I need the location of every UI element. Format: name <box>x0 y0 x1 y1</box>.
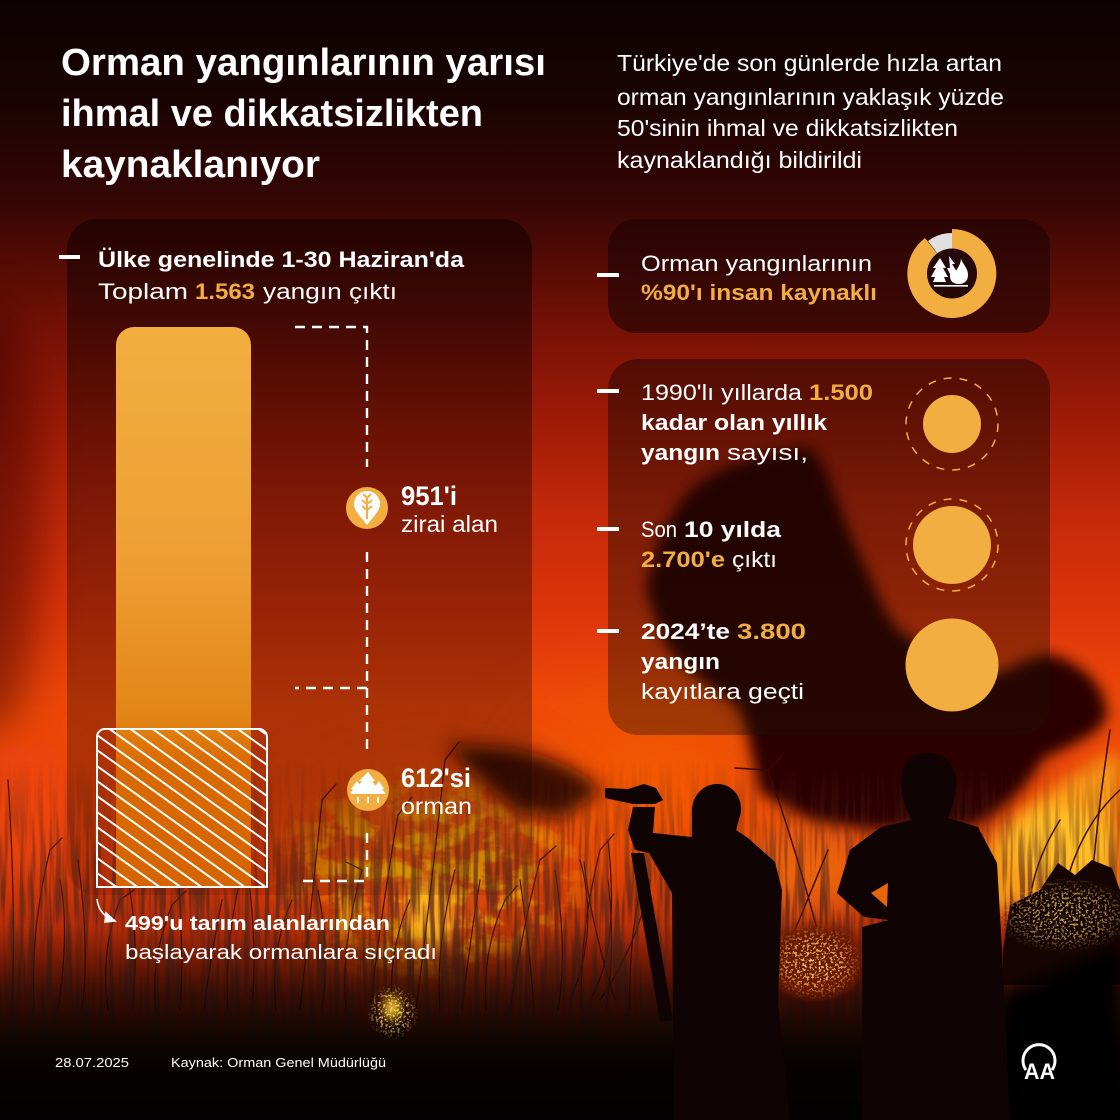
item: 2024: 3.800 <box>737 619 806 644</box>
text: 90 percent: %90'ı insan kaynaklı <box>641 280 877 305</box>
title: Orman yangınlarının yarısı <box>61 42 546 84</box>
icon: forest <box>347 769 389 811</box>
item: last 10 years: 10 yılda <box>684 517 782 542</box>
label: 951 agricultural: 951'i <box>401 481 457 511</box>
note: 499 fires <box>125 913 437 964</box>
grass <box>8 742 650 1010</box>
icon: trees and flame <box>931 256 968 287</box>
hatched segment: 499 fires <box>96 728 268 888</box>
panel heading: June fires: Toplam <box>98 279 188 304</box>
item: last 10 years: çıktı <box>732 547 777 572</box>
note: 499 fires: başlayarak ormanlara sıçradı <box>125 942 437 964</box>
item: 1990s: 1990'lı yıllarda <box>641 380 803 405</box>
item: last 10 years: 2.700'e <box>641 547 725 572</box>
logo: AA <box>1023 1045 1055 1084</box>
panel heading: June fires <box>59 247 465 304</box>
item: last 10 years: Son <box>641 517 677 542</box>
item: 1990s <box>597 380 873 465</box>
burning brush between the firefighters <box>767 926 863 998</box>
icon: wheat <box>346 487 388 529</box>
label: 951 agricultural: zirai alan <box>401 511 498 537</box>
dark ground on the right <box>1000 945 1120 1120</box>
smoke plume <box>445 447 1107 830</box>
item: 1990s: sayısı, <box>727 440 808 465</box>
label: 612 forest <box>401 763 472 819</box>
text: 90 percent <box>641 251 877 305</box>
item: 2024: kayıtlara geçti <box>641 679 804 704</box>
firefighter silhouettes <box>605 753 1010 1120</box>
bush on the right <box>1003 860 1120 985</box>
right side flames <box>985 750 1120 915</box>
panel: human caused <box>597 219 1050 333</box>
intro paragraph <box>617 50 1004 173</box>
arrow: spread <box>97 899 115 922</box>
item: 2024: 2024’te <box>641 619 730 644</box>
circle: 1500 <box>906 378 998 470</box>
donut chart: 90 percent <box>907 229 996 318</box>
panel: June fires <box>59 219 532 995</box>
intro paragraph: orman yangınlarının yaklaşık yüzde <box>617 84 1004 110</box>
circle: 2700 <box>906 499 998 591</box>
item: 2024 <box>597 619 806 704</box>
note: 499 fires: 499'u tarım alanlarından <box>125 913 390 935</box>
item: 1990s: 1.500 <box>809 380 873 405</box>
title: kaynaklanıyor <box>61 144 320 186</box>
panel heading: June fires: 1.563 <box>195 279 255 304</box>
label: 612 forest: 612'si <box>401 763 471 793</box>
source: Kaynak: Orman Genel Müdürlüğü <box>171 1055 386 1070</box>
item: 1990s: yangın <box>641 440 720 465</box>
dashed bracket: 612 <box>299 688 367 881</box>
dashed bracket: 951 <box>295 327 367 688</box>
intro paragraph: Türkiye'de son günlerde hızla artan <box>617 50 1002 76</box>
circle: 3800 <box>906 618 998 712</box>
bar chart: 1.563 fires <box>96 327 268 888</box>
item: 2024: yangın <box>641 649 720 674</box>
title: ihmal ve dikkatsizlikten <box>61 93 483 135</box>
item: 1990s: kadar olan yıllık <box>641 410 828 435</box>
intro paragraph: kaynaklandığı bildirildi <box>617 147 862 173</box>
label: 612 forest: orman <box>401 793 472 819</box>
text: 90 percent: Orman yangınlarının <box>641 251 872 276</box>
panel: fire counts over time <box>597 359 1050 735</box>
item: last 10 years <box>597 517 782 572</box>
title <box>61 42 546 186</box>
panel heading: June fires: yangın çıktı <box>263 279 397 304</box>
intro paragraph: 50'sinin ihmal ve dikkatsizlikten <box>617 115 958 141</box>
panel heading: June fires: Ülke genelinde 1-30 Haziran'da <box>98 247 465 272</box>
logo: AA: AA <box>1024 1059 1055 1084</box>
label: 951 agricultural <box>401 481 498 537</box>
date: 28.07.2025 <box>55 1055 129 1070</box>
